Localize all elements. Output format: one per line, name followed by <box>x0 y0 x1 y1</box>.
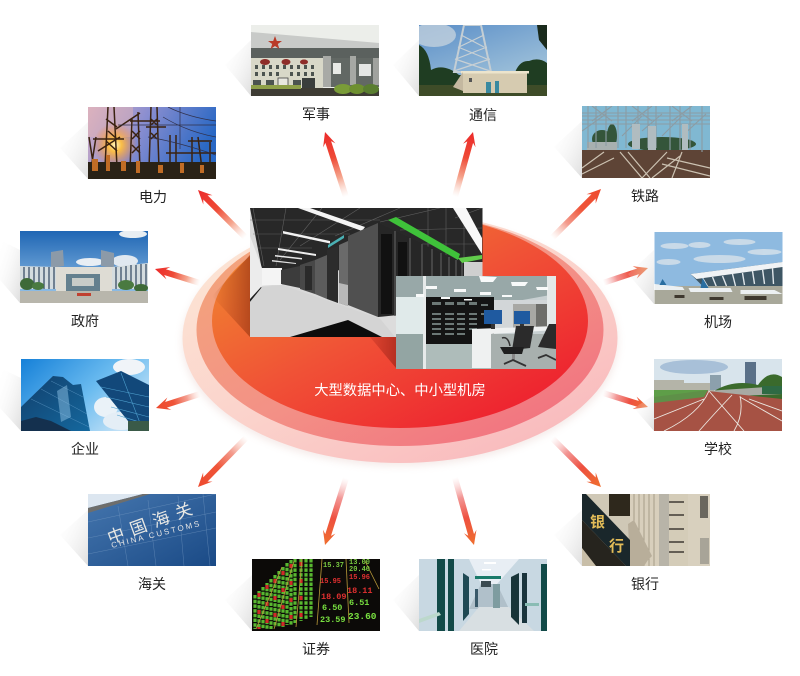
tile: railway <box>554 106 710 178</box>
arrow: to securities <box>319 476 352 547</box>
arrow: to railway <box>548 184 606 242</box>
tile: telecom <box>393 23 547 96</box>
label: 机场: 机场 <box>704 314 732 330</box>
arrow: to hospital <box>449 476 480 547</box>
distant racks <box>281 266 300 288</box>
tile: securities: 6.50 <box>322 603 342 613</box>
label: 军事: 军事 <box>302 106 330 122</box>
label: 证券: 证券 <box>302 641 330 657</box>
label: 铁路: 铁路 <box>631 188 659 204</box>
tile: customs: 中国海关 <box>105 497 202 548</box>
tile: power <box>60 107 216 179</box>
label: 电力: 电力 <box>139 189 167 205</box>
arrow: to customs <box>193 433 251 492</box>
floor <box>250 285 410 337</box>
label: 海关: 海关 <box>138 576 166 592</box>
tile: securities: 20.40 <box>349 566 370 574</box>
tile: securities: 15.37 <box>323 562 344 570</box>
tile: securities: 18.11 <box>347 586 373 596</box>
tile: military <box>225 25 379 96</box>
tile: securities: 23.59 <box>320 615 346 625</box>
tile: government <box>0 230 148 303</box>
tile: securities: 15.96 <box>349 574 370 582</box>
arrow: to airport <box>601 262 650 289</box>
arrow: to military <box>319 130 352 199</box>
arrow: to government <box>153 263 202 289</box>
server racks <box>426 297 494 344</box>
arrow: to telecom <box>449 130 479 198</box>
arrow: to enterprise <box>154 388 202 414</box>
tile: airport <box>628 232 782 304</box>
tile: securities: 23.60 <box>348 611 377 622</box>
ceiling lights <box>416 276 548 300</box>
photo: large data center <box>250 208 482 337</box>
near front row <box>378 223 467 317</box>
tile: school <box>634 359 782 431</box>
center caption: 大型数据中心、中小型机房 <box>314 382 486 399</box>
label: 企业: 企业 <box>71 441 99 457</box>
arrow: to bank <box>548 434 606 492</box>
desk <box>472 326 556 368</box>
label: 通信: 通信 <box>469 107 497 123</box>
chairs <box>512 326 534 350</box>
near side <box>348 223 378 317</box>
tile: securities: 15.95 <box>320 578 341 586</box>
tile: bank: 银 <box>590 513 605 531</box>
tile: securities <box>225 559 380 631</box>
photo: small server room <box>396 276 556 369</box>
tile: securities: 13.00 <box>349 559 370 567</box>
green strip <box>388 217 460 260</box>
label: 医院: 医院 <box>470 641 498 657</box>
tile: securities: 18.09 <box>321 592 347 602</box>
tile: bank <box>554 494 710 566</box>
tile: customs: CHINA CUSTOMS <box>110 519 202 550</box>
tile: securities: 6.51 <box>349 598 369 608</box>
monitors <box>484 310 502 324</box>
left wall <box>250 236 282 300</box>
ceiling <box>250 208 483 272</box>
label: 银行: 银行 <box>631 576 659 592</box>
central stacked ellipse platform <box>182 213 618 466</box>
arrow: to power <box>193 185 250 242</box>
tile: bank: 行 <box>609 538 624 555</box>
arrow: to school <box>601 387 650 413</box>
label: 学校: 学校 <box>704 441 732 457</box>
tile: hospital <box>393 559 547 631</box>
mid racks <box>315 255 327 299</box>
label: 政府: 政府 <box>71 313 99 329</box>
tile: customs <box>60 494 216 566</box>
tile: enterprise <box>0 359 150 431</box>
